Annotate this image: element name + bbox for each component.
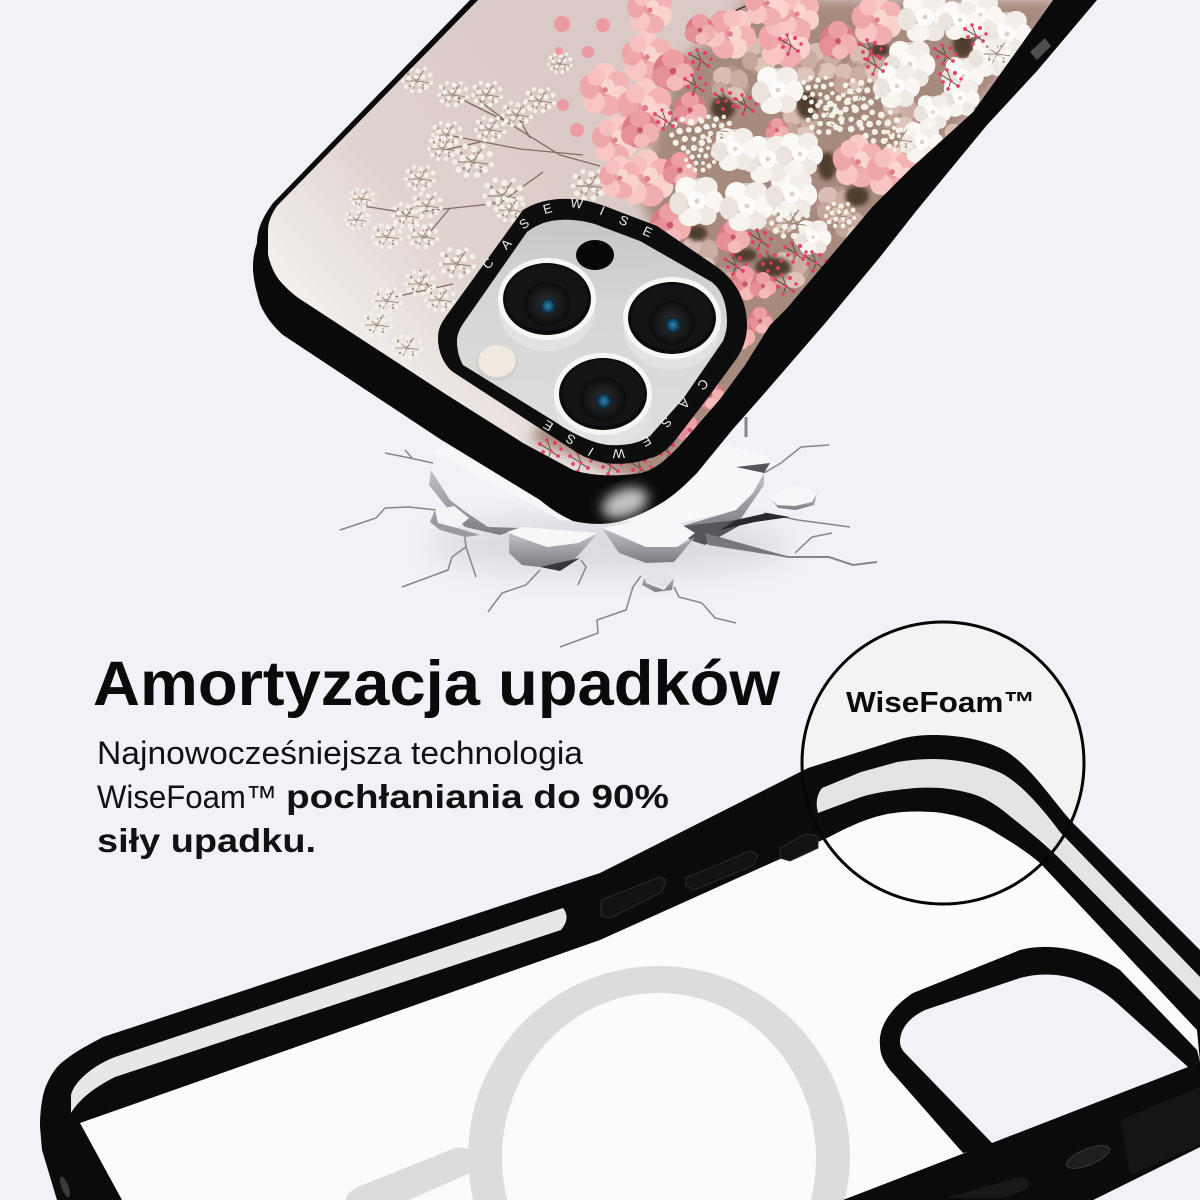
baby breath cream clusters	[669, 38, 1015, 239]
rock bottom	[633, 563, 674, 592]
right plate side	[676, 473, 764, 530]
CASEWISE bottom label: CASEWISE	[542, 380, 708, 458]
left ledge	[429, 470, 521, 535]
muted flowers layer	[683, 36, 961, 289]
power button slot	[686, 851, 758, 890]
line 2 bold: pochłaniania do 90%	[286, 778, 669, 815]
impact crater	[340, 417, 877, 647]
dark wedge	[736, 463, 770, 473]
photo backdrop	[250, 0, 1080, 480]
line 1: Najnowocześniejsza technologia	[97, 735, 583, 771]
CASEWISE top label: CASEWISE	[484, 198, 653, 268]
camera sensor	[576, 240, 614, 270]
floral back photo	[250, 0, 1080, 485]
twigs	[363, 0, 760, 298]
camera plate	[457, 220, 727, 445]
lens right	[623, 277, 721, 370]
lower edge sheen	[1120, 1087, 1200, 1175]
crater shadow	[430, 515, 790, 575]
flower bed base	[530, 0, 1065, 485]
side button detail	[1030, 38, 1051, 60]
flash	[476, 345, 518, 381]
bottom speaker slot	[1064, 1141, 1112, 1173]
camera surround	[438, 199, 747, 464]
centre dark shadow	[676, 518, 753, 545]
left speaker hole	[58, 1175, 72, 1199]
side gap left	[71, 908, 567, 1113]
camera cutout frame	[880, 947, 1200, 1153]
magsafe ring	[468, 966, 850, 1200]
ridge shadow right	[705, 533, 790, 557]
crack lines	[340, 417, 877, 647]
rock right	[770, 485, 817, 510]
chunk centre left	[507, 527, 598, 571]
case black bumper	[253, 0, 1097, 524]
crater white bulge	[431, 440, 770, 523]
pink flowers	[580, 0, 916, 443]
chunk centre right	[602, 520, 695, 563]
description text	[97, 735, 669, 859]
camera cutout hole	[900, 975, 1188, 1143]
lens bottom	[554, 353, 652, 446]
line 2 regular: WiseFoam™	[97, 779, 277, 815]
case frame	[40, 735, 1200, 1200]
lower edge band	[843, 1062, 1200, 1200]
clear phone case	[40, 735, 1200, 1200]
dark pockets	[687, 30, 973, 277]
lens upper left	[498, 258, 596, 351]
pink berries	[538, 23, 988, 479]
top phone case	[252, 0, 1097, 524]
volume button slot	[601, 877, 666, 918]
callout circle outline	[802, 622, 1084, 904]
chunk left small	[430, 506, 480, 537]
line 3 bold: siły upadku.	[97, 822, 316, 859]
ridge shadow upper	[720, 513, 790, 530]
lenses	[498, 258, 721, 446]
baby breath left sprigs	[344, 53, 609, 360]
pink buds	[554, 16, 610, 137]
callout circle fill	[802, 622, 1084, 904]
heading: Amortyzacja upadków	[93, 649, 781, 719]
bottom button slot	[945, 1177, 1029, 1198]
white flowers	[669, 0, 1032, 255]
callout label: WiseFoam™	[846, 687, 1035, 719]
mute switch slot	[780, 834, 818, 861]
side gap top right	[817, 759, 1200, 1000]
bumper highlight	[598, 482, 652, 524]
magsafe bar	[346, 1148, 478, 1200]
right plate	[650, 443, 770, 522]
clear interior	[80, 811, 1200, 1200]
